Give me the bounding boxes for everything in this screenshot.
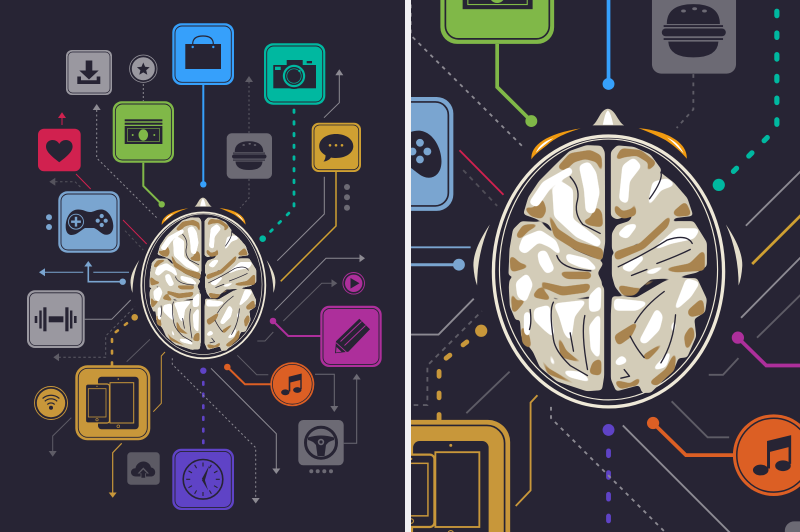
icon: steering wheel xyxy=(298,420,344,465)
icon: pencil xyxy=(320,306,382,367)
icon: phone and tablet xyxy=(75,365,150,440)
brain folds: white highlights xyxy=(154,225,252,344)
brain folds: dark sulci xyxy=(161,232,248,343)
skull outline rings xyxy=(141,212,265,358)
connector end dots xyxy=(46,181,350,473)
brain xyxy=(131,198,275,358)
icon: wifi xyxy=(34,386,68,420)
icon: camera xyxy=(264,43,325,105)
icon: burger xyxy=(227,133,272,179)
brain folds: brown shadows xyxy=(151,220,255,348)
icon: shopping bag xyxy=(172,23,234,85)
icon: heart xyxy=(38,129,81,171)
arrow heads xyxy=(39,69,365,504)
panel: full brain and icon map xyxy=(27,23,382,510)
icon: game controller xyxy=(58,191,120,253)
icon: clock xyxy=(172,449,234,510)
icon: download xyxy=(66,50,112,95)
icon: play button xyxy=(343,272,365,294)
icon: music note xyxy=(270,362,314,406)
icon: star badge xyxy=(130,55,157,82)
icon: dumbbell xyxy=(27,290,85,348)
panel: zoomed close-up of the brain xyxy=(411,0,800,532)
icon: cloud upload xyxy=(127,452,160,485)
icon: money xyxy=(113,101,174,163)
icon: speech bubble xyxy=(312,123,361,172)
brain ornaments: cone, orange arcs, side fangs xyxy=(131,198,275,293)
connector lines xyxy=(44,75,360,498)
brain lobes xyxy=(150,218,256,350)
